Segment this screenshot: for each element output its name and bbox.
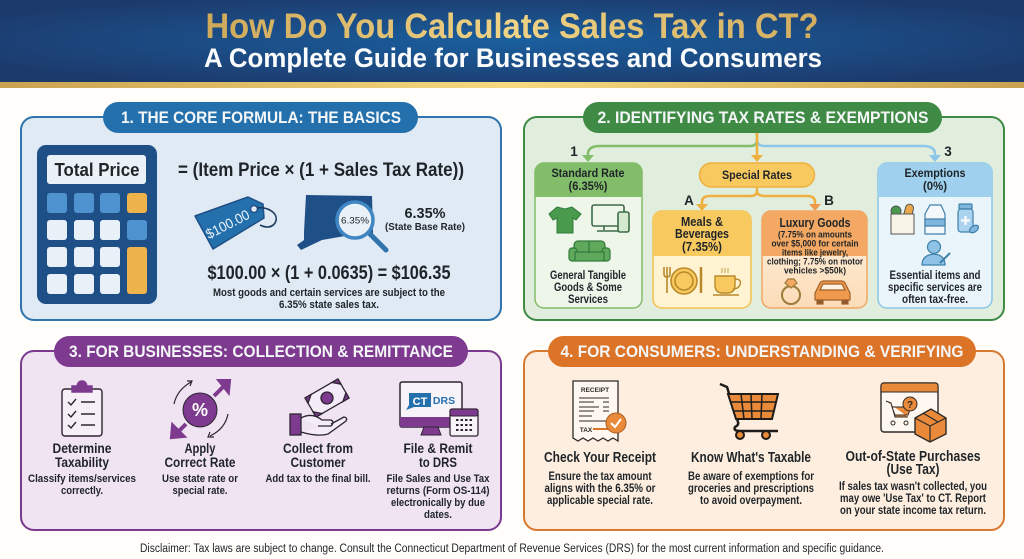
item text: groceries and prescriptions [688, 483, 814, 495]
flow labels: 3 [944, 144, 952, 159]
icon: sofa [569, 241, 610, 261]
step text: Use state rate or [162, 473, 239, 485]
step text: dates. [424, 509, 452, 521]
icon: monitor with CT DRS logo and calendar [400, 382, 478, 436]
card: luxury goods: over $5,000 for certain [772, 238, 859, 248]
formula: = (Item Price × (1 + Sales Tax Rate)) [178, 159, 464, 181]
item text: on your state income tax return. [840, 505, 986, 517]
step: apply correct rate [162, 381, 239, 497]
card: special rates [700, 163, 814, 187]
panel heading: core formula [103, 102, 418, 133]
flow labels: A [684, 193, 694, 208]
icon: browser window, cart and parcel [881, 383, 946, 442]
card text [888, 270, 982, 306]
icon: receipt with check mark: RECEIPT [581, 387, 609, 394]
step text: Collect from [283, 441, 353, 456]
worked example: $100.00 × (1 + 0.0635) = $106.35 [208, 263, 451, 284]
icon: Connecticut map with magnifier [297, 195, 386, 250]
item text [839, 449, 987, 517]
icon: clipboard checklist [62, 381, 102, 436]
note [213, 287, 445, 311]
icon: service person [922, 240, 950, 265]
step text: Taxability [55, 455, 109, 470]
step text: Determine [52, 441, 112, 456]
card text: Essential items and [890, 270, 980, 282]
header banner [0, 0, 1024, 88]
panel heading: consumers [548, 336, 976, 367]
flow labels: 1 [570, 144, 578, 159]
icon: grocery bag [891, 203, 914, 234]
item text: Be aware of exemptions for [688, 471, 814, 483]
icon: milk carton [925, 205, 945, 234]
step text: to DRS [419, 455, 457, 470]
item text [688, 450, 814, 507]
panel heading: consumers: 4. FOR CONSUMERS: UNDERSTANDING & VERIFYING [560, 342, 964, 361]
icon: price tag [195, 197, 276, 249]
card: luxury goods [762, 211, 867, 308]
step text [266, 441, 370, 485]
card: exemptions: Exemptions [904, 166, 966, 180]
rate label: 6.35% [404, 205, 446, 222]
flow arrows [582, 133, 941, 211]
item text: If sales tax wasn't collected, you [839, 481, 987, 493]
item text: applicable special rate. [547, 495, 653, 507]
card: standard rate [535, 163, 642, 308]
card text: often tax-free. [902, 294, 968, 306]
icon: monitor with CT DRS logo and calendar: CT [413, 396, 428, 408]
step text: Add tax to the final bill. [266, 473, 370, 485]
item text: (Use Tax) [886, 462, 940, 478]
panel: tax rates and exemptions [524, 102, 1004, 320]
step text [162, 441, 239, 497]
flow labels [570, 144, 952, 208]
icon: monitor and phone [592, 205, 629, 232]
icon: plate and cutlery [664, 267, 701, 294]
title: How Do You Calculate Sales Tax in CT? [206, 7, 818, 46]
item text: Ensure the tax amount [548, 471, 652, 483]
card text: specific services are [888, 282, 982, 294]
step: file and remit [386, 382, 490, 521]
icon: calculator: Total Price [54, 159, 140, 180]
step text: special rate. [172, 485, 228, 497]
flow labels: B [824, 193, 834, 208]
icon: Connecticut map with magnifier: 6.35% [341, 216, 370, 226]
item text [544, 450, 656, 507]
rate label: (State Base Rate) [385, 221, 465, 233]
item: know what's taxable [688, 384, 814, 507]
card: luxury goods: vehicles >$50k) [784, 266, 846, 276]
icon: monitor with CT DRS logo and calendar: DRS [433, 395, 455, 407]
item: check your receipt [544, 381, 656, 507]
step text [386, 441, 490, 521]
card: luxury goods: Luxury Goods [780, 216, 851, 230]
card: special rates: Special Rates [722, 170, 792, 182]
item: out-of-state purchases [839, 383, 987, 517]
icon: shopping cart [720, 384, 778, 439]
step text: File & Remit [404, 441, 473, 456]
item text: Know What's Taxable [691, 450, 811, 466]
rate label [385, 205, 465, 233]
card text: Goods & Some [554, 282, 622, 294]
step text: correctly. [61, 485, 103, 497]
panel heading: core formula: 1. THE CORE FORMULA: THE BASICS [121, 108, 401, 127]
step text: returns (Form OS-114) [386, 485, 490, 497]
card: standard rate: Standard Rate [552, 166, 625, 180]
panel heading: rates [583, 102, 942, 133]
icon: medicine bottle [958, 204, 980, 234]
step text: electronically by due [391, 497, 485, 509]
icon: ring [782, 279, 800, 304]
step: determine taxability [28, 381, 136, 497]
card text [550, 270, 626, 306]
icon: coffee cup [713, 268, 740, 295]
step: collect from customer [266, 379, 370, 485]
step text: Correct Rate [164, 455, 236, 470]
icon: price tag: $100.00 [203, 206, 252, 242]
card: meals and beverages [653, 211, 751, 308]
card: exemptions: (0%) [923, 179, 947, 193]
card: luxury goods: (7.75% on amounts [778, 230, 852, 240]
card text: Services [568, 294, 608, 306]
step text [28, 441, 136, 497]
icon: receipt with check mark: TAX [580, 427, 593, 434]
item text: may owe 'Use Tax' to CT. Report [840, 493, 986, 505]
card: exemptions [878, 163, 992, 308]
icon: calculator [37, 145, 157, 304]
panel: for businesses [21, 336, 501, 530]
note: Most goods and certain services are subject to the [213, 287, 445, 299]
icon: receipt with check mark [573, 381, 626, 441]
disclaimer: Disclaimer: Tax laws are subject to change. Consult the Connecticut Department of Revenue Services (DRS) for the most current information and specific guidance. [140, 543, 884, 555]
card: meals and beverages: Beverages [675, 227, 729, 241]
panel: core formula [21, 102, 501, 320]
icon: percent with arrows: % [192, 400, 208, 420]
panel heading: businesses: 3. FOR BUSINESSES: COLLECTION & REMITTANCE [69, 342, 453, 361]
icon: browser window, cart and parcel: ? [907, 400, 913, 411]
step text: File Sales and Use Tax [386, 473, 490, 485]
note: 6.35% state sales tax. [279, 299, 379, 311]
card: luxury goods: clothing; 7.75% on motor [767, 256, 863, 266]
item text: Check Your Receipt [544, 450, 656, 466]
step text: Apply [184, 441, 216, 456]
icon: car [815, 281, 850, 304]
subtitle: A Complete Guide for Businesses and Consumers [204, 43, 822, 73]
panel heading: rates: 2. IDENTIFYING TAX RATES & EXEMPTIONS [598, 108, 928, 127]
item text: aligns with the 6.35% or [544, 483, 656, 495]
card: meals and beverages: Meals & [681, 215, 723, 229]
step text: Classify items/services [28, 473, 136, 485]
card: meals and beverages: (7.35%) [682, 240, 722, 254]
icon: shirt [549, 207, 581, 233]
panel heading: businesses [54, 336, 468, 367]
icon: hand with banknote [290, 379, 349, 435]
step text: Customer [290, 455, 346, 470]
panel: for consumers [524, 336, 1004, 530]
card: luxury goods: items like jewelry, [782, 248, 848, 258]
card text: General Tangible [550, 270, 626, 282]
item text: to avoid overpayment. [700, 495, 802, 507]
item text: Out-of-State Purchases [846, 449, 980, 465]
card: standard rate: (6.35%) [568, 179, 608, 193]
